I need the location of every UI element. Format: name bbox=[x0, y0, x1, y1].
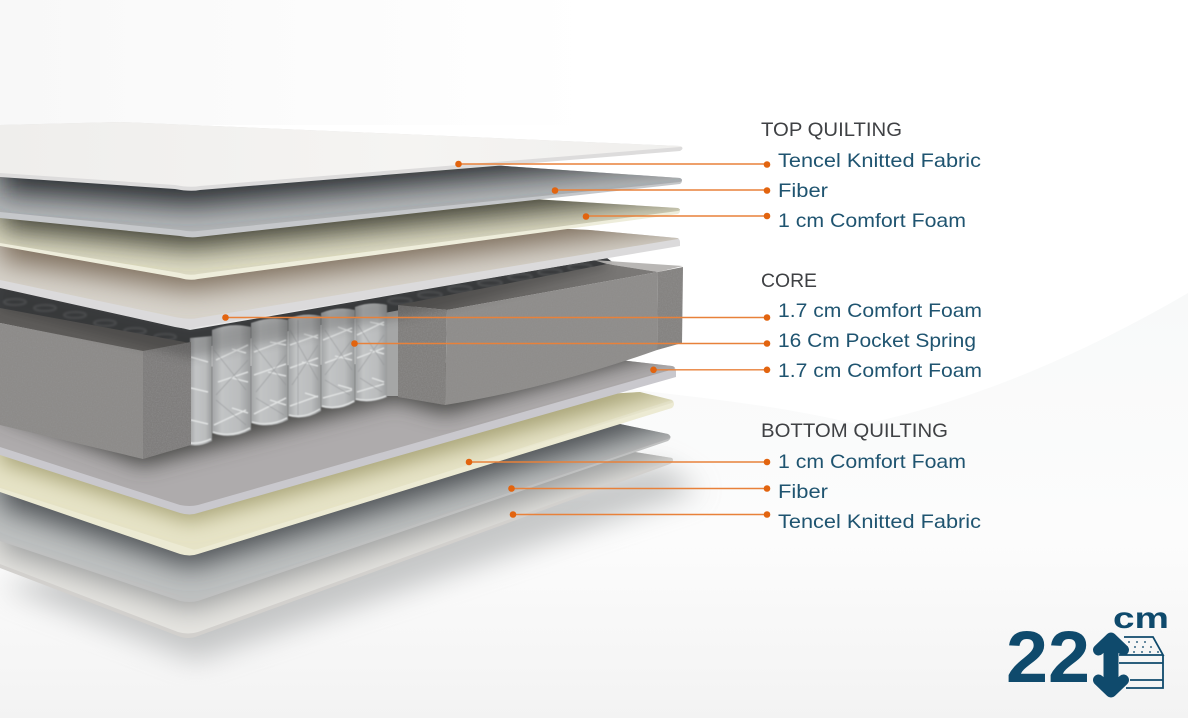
icon: height arrow bbox=[1098, 638, 1124, 692]
core: left foam block bbox=[0, 308, 191, 459]
shadow cast by upper layers on core bbox=[0, 258, 610, 358]
label: 16 cm pocket spring: 16 Cm Pocket Spring bbox=[778, 330, 976, 352]
callout: top fiber bbox=[552, 187, 770, 194]
core: 16 cm pocket springs bbox=[0, 258, 615, 446]
mattress drop shadow bbox=[0, 465, 700, 660]
label: bottom fiber: Fiber bbox=[778, 481, 829, 503]
callout: pocket spring bbox=[351, 340, 770, 347]
label: tencel knitted fabric: Tencel Knitted Fabric bbox=[778, 150, 981, 172]
layer: bottom fiber bbox=[0, 424, 670, 602]
callout: core lower foam bbox=[650, 366, 770, 373]
label: 1.7 cm comfort foam lower: 1.7 cm Comfort Foam bbox=[778, 360, 982, 382]
spring 3 bbox=[251, 319, 288, 425]
heading: core: CORE bbox=[761, 271, 817, 292]
callout: top comfort foam bbox=[583, 213, 770, 220]
core: right foam block bbox=[398, 260, 683, 405]
back filler bbox=[380, 300, 400, 396]
callout: core upper foam bbox=[222, 314, 770, 321]
icon: mattress bbox=[1119, 637, 1163, 688]
spring 2 bbox=[212, 325, 251, 436]
layer: bottom comfort foam bbox=[0, 380, 690, 556]
callout: bottom tencel knitted fabric bbox=[510, 511, 770, 518]
number: 22: 22 bbox=[1006, 617, 1090, 698]
layer: lower 1.7 cm comfort foam bbox=[0, 360, 676, 514]
callout: bottom fiber bbox=[508, 485, 770, 492]
label: 1 cm comfort foam: 1 cm Comfort Foam bbox=[778, 210, 966, 232]
heading: top quilting: TOP QUILTING bbox=[761, 120, 902, 141]
unit: cm: cm bbox=[1113, 602, 1169, 635]
callout: bottom comfort foam bbox=[466, 459, 770, 465]
height badge: 22 cm bbox=[1006, 602, 1169, 698]
layer: upper fiber bbox=[0, 166, 682, 238]
spring 6 bbox=[355, 303, 387, 401]
spring 1 bbox=[190, 336, 212, 446]
heading: bottom quilting: BOTTOM QUILTING bbox=[761, 421, 948, 442]
label: bottom tencel knitted fabric: Tencel Knitted Fabric bbox=[778, 511, 981, 533]
coil top band bbox=[0, 258, 615, 350]
layer: top tencel knitted fabric bbox=[0, 122, 682, 191]
label: fiber: Fiber bbox=[778, 180, 829, 202]
label: bottom 1 cm comfort foam: 1 cm Comfort Foam bbox=[778, 451, 966, 473]
label: 1.7 cm comfort foam: 1.7 cm Comfort Foam bbox=[778, 300, 982, 322]
layer: upper comfort foam bbox=[0, 200, 680, 280]
callout: top tencel knitted fabric bbox=[455, 161, 770, 168]
spring 4 bbox=[288, 315, 321, 418]
layer: upper 1.7 cm comfort foam bbox=[0, 228, 680, 328]
spring 5 bbox=[321, 309, 355, 409]
callout lines and dots bbox=[222, 161, 770, 518]
layer: bottom tencel knitted fabric bbox=[0, 452, 673, 638]
